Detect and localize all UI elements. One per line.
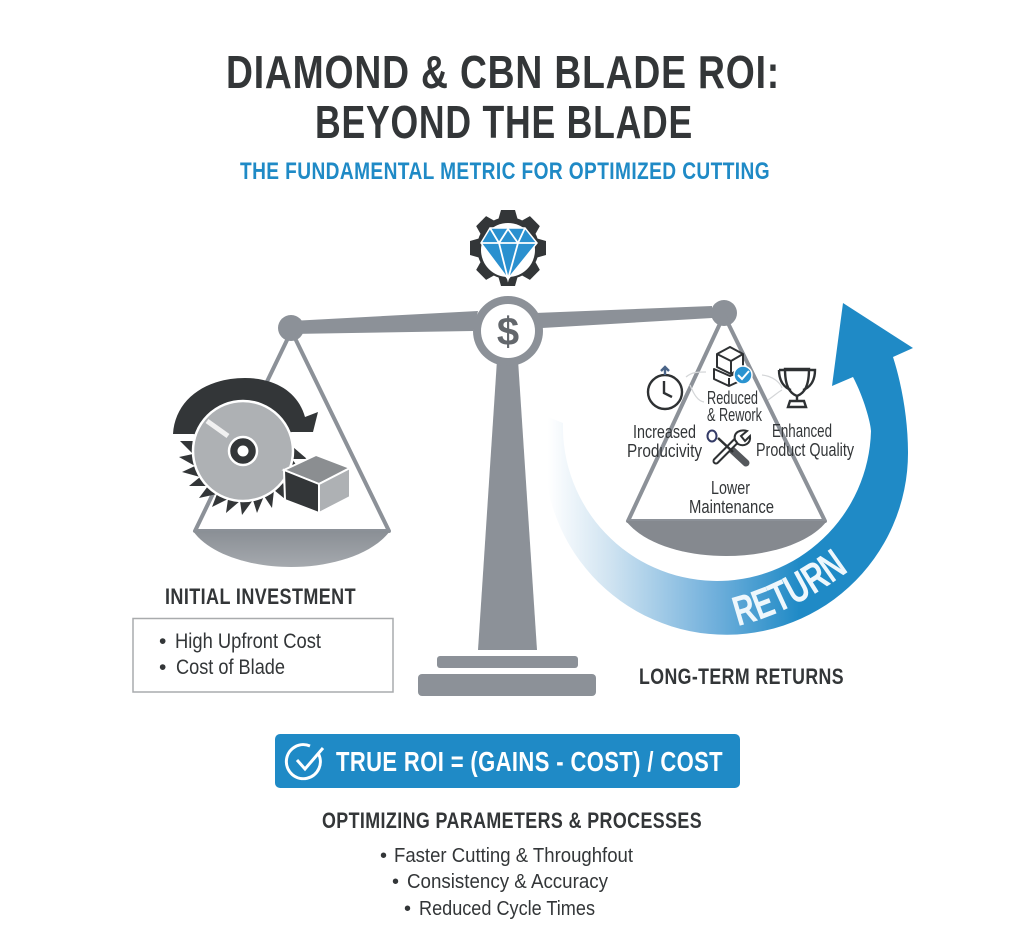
text: reduced and rework: Reduced	[707, 388, 758, 408]
icon: boxes with check	[714, 347, 752, 386]
subtitle: THE FUNDAMENTAL METRIC FOR OPTIMIZED CUTTING	[240, 158, 770, 185]
panel: initial investment list: •	[159, 630, 166, 653]
title	[226, 46, 780, 148]
panel: initial investment list	[133, 618, 393, 692]
text: reduced and rework: & Rework	[707, 405, 763, 425]
panel: initial investment list: •	[159, 656, 166, 679]
callout: true roi formula	[275, 734, 740, 788]
panel: initial investment list: High Upfront Cost	[175, 630, 321, 653]
list: optimization bullets: Consistency & Accuracy	[407, 871, 608, 893]
panel: initial investment list: Cost of Blade	[176, 656, 285, 679]
icon: clock	[648, 367, 682, 409]
left pan	[193, 332, 390, 567]
text: increased productivity: Producivity	[627, 441, 702, 461]
list: optimization bullets	[380, 845, 633, 920]
text: lower maintenance: Lower	[711, 478, 750, 498]
icon: check circle	[286, 745, 323, 779]
text: lower maintenance: Maintenance	[689, 497, 774, 517]
text: increased productivity: Increased	[633, 422, 696, 442]
text: increased productivity	[627, 422, 702, 461]
arrow: return curve	[559, 303, 913, 635]
icon: saw blade and cube	[173, 378, 350, 515]
list: optimization bullets: •	[404, 898, 411, 920]
connector arcs between benefits	[686, 372, 782, 402]
callout: true roi formula: TRUE ROI = (GAINS - COST) / COST	[336, 746, 723, 777]
icon: dollar sign: $	[497, 310, 519, 354]
list: optimization bullets: •	[380, 845, 387, 867]
list: optimization bullets: Reduced Cycle Times	[419, 898, 595, 920]
icon: trophy	[779, 369, 815, 407]
heading: initial investment: INITIAL INVESTMENT	[165, 584, 356, 609]
text: enhanced product quality: Product Quality	[756, 440, 854, 460]
right pan	[626, 315, 827, 556]
text: lower maintenance	[689, 478, 774, 517]
list: optimization bullets: •	[392, 871, 399, 893]
heading: long-term returns: LONG-TERM RETURNS	[639, 664, 844, 689]
list: optimization bullets: Faster Cutting & Throughfout	[394, 845, 633, 867]
icon: diamond in gear	[470, 210, 546, 286]
icon: wrench and screwdriver	[708, 430, 750, 463]
text: enhanced product quality: Enhanced	[772, 421, 832, 441]
title: BEYOND THE BLADE	[315, 96, 693, 148]
label: return: RETURN	[732, 548, 848, 626]
text: reduced and rework	[707, 388, 763, 425]
text: enhanced product quality	[756, 421, 854, 460]
heading: optimizing parameters: OPTIMIZING PARAMETERS & PROCESSES	[322, 808, 702, 833]
title: DIAMOND & CBN BLADE ROI:	[226, 46, 780, 98]
scale: beam, column and base	[278, 296, 737, 696]
